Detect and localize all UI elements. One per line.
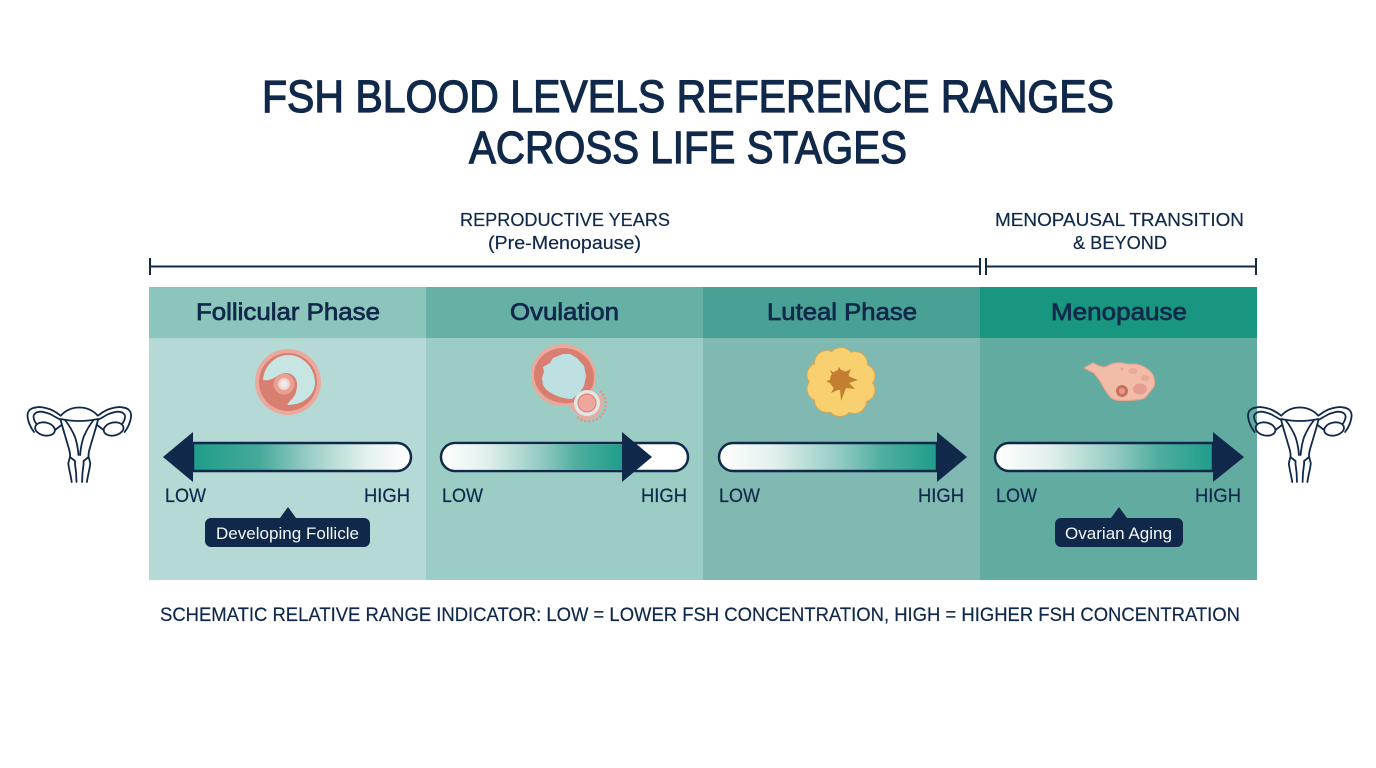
header: ovulation: [426, 287, 703, 338]
header: ovulation: Ovulation: [510, 299, 619, 326]
icon: developing follicle: [255, 349, 321, 415]
label: low: LOW: [442, 486, 483, 507]
icon: aging ovary: [1084, 363, 1154, 400]
callout: ovarian aging: [1055, 507, 1183, 547]
range bar: low: [163, 432, 411, 482]
icon: right uterus: [1248, 407, 1352, 482]
label: high: HIGH: [1195, 486, 1241, 507]
title: FSH BLOOD LEVELS REFERENCE RANGES: [262, 71, 1114, 122]
heading: menopausal transition: [995, 209, 1244, 253]
header: follicular phase: [149, 287, 426, 338]
label: low: LOW: [996, 486, 1037, 507]
range bar: highest: [995, 432, 1244, 482]
label: low: LOW: [165, 486, 206, 507]
range bar: mid-high: [441, 432, 688, 482]
panel: ovulation: [426, 287, 703, 580]
heading: reproductive years: (Pre-Menopause): [488, 232, 641, 253]
callout: ovarian aging: Ovarian Aging: [1065, 525, 1172, 543]
footnote: SCHEMATIC RELATIVE RANGE INDICATOR: LOW = LOWER FSH CONCENTRATION, HIGH = HIGHER FSH CONCENTRATION: [160, 605, 1240, 626]
header: menopause: Menopause: [1051, 299, 1187, 326]
icon: ovulating follicle: [531, 344, 606, 421]
callout: developing follicle: Developing Follicle: [216, 525, 359, 543]
header: luteal phase: [703, 287, 980, 338]
heading: menopausal transition: MENOPAUSAL TRANSITION: [995, 209, 1244, 230]
icon: left uterus: [28, 407, 131, 482]
bracket: reproductive years: [150, 258, 980, 275]
callout: developing follicle: [205, 507, 370, 547]
label: high: HIGH: [918, 486, 964, 507]
label: high: HIGH: [364, 486, 410, 507]
title: [262, 71, 1114, 173]
header: menopause: [980, 287, 1257, 338]
header: follicular phase: Follicular Phase: [196, 299, 380, 326]
heading: reproductive years: [460, 209, 670, 253]
panel: menopause: [980, 287, 1257, 580]
icon: corpus luteum: [806, 347, 876, 417]
title: ACROSS LIFE STAGES: [469, 122, 907, 173]
bracket: menopausal transition: [986, 258, 1256, 275]
label: low: LOW: [719, 486, 760, 507]
panel: luteal phase: [703, 287, 980, 580]
range bar: high: [719, 432, 967, 482]
label: high: HIGH: [641, 486, 687, 507]
heading: menopausal transition: & BEYOND: [1073, 232, 1167, 253]
heading: reproductive years: REPRODUCTIVE YEARS: [460, 209, 670, 230]
header: luteal phase: Luteal Phase: [767, 299, 917, 326]
panel: follicular phase: [149, 287, 426, 580]
